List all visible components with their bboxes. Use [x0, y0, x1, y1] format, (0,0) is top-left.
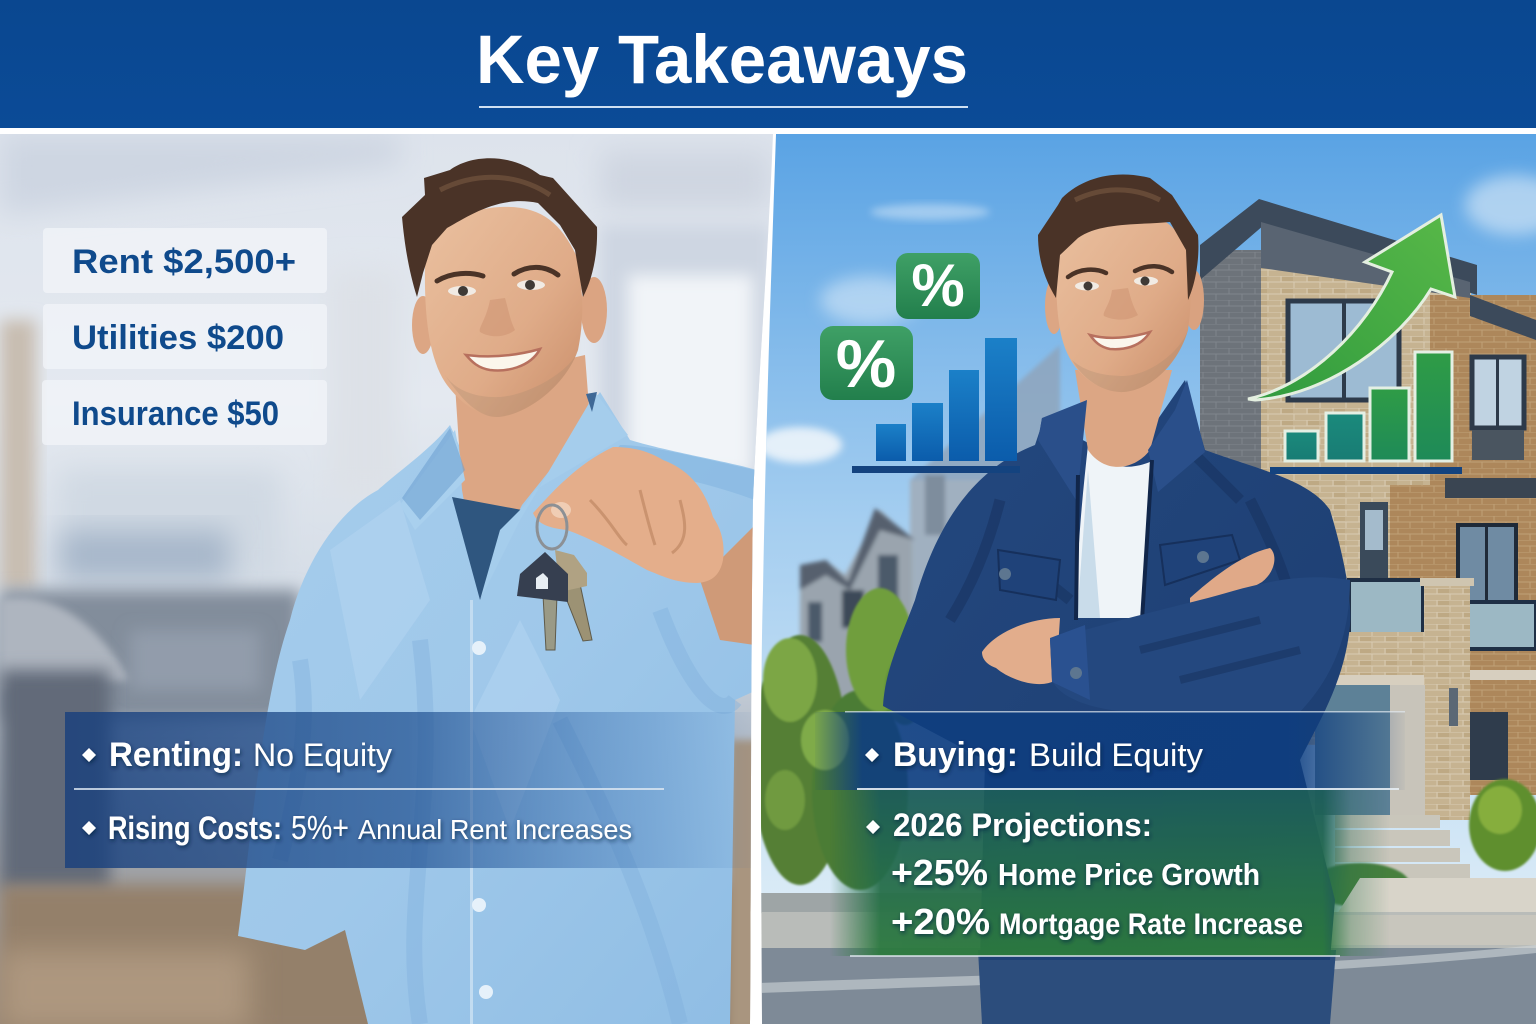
hair: [402, 158, 597, 297]
brows and eyes: [1068, 266, 1172, 277]
panel: buying text: [865, 736, 1303, 942]
ear left: [412, 296, 431, 354]
projection: mortgage rate: [891, 901, 1303, 942]
card: rent: Rent $2,500+: [72, 243, 296, 281]
middle band: [1445, 478, 1536, 498]
smile: [466, 349, 540, 370]
balconies: [1349, 580, 1423, 635]
ear right: [581, 277, 607, 343]
card: insurance: [42, 380, 327, 445]
pockets: [998, 550, 1060, 600]
icon: percent tile upper: [896, 252, 980, 319]
panel: blue buying band: [815, 712, 1405, 790]
upper window: [1288, 301, 1399, 400]
bullet: renting: Renting:: [109, 736, 243, 774]
bullet: rising costs: Annual Rent Increases: [358, 814, 632, 845]
entrance: [1315, 685, 1390, 815]
shirt: [238, 392, 757, 1024]
nose: [480, 298, 515, 336]
lower window: [1458, 525, 1516, 603]
t-shirt: [1077, 445, 1150, 618]
distant houses: [800, 345, 1060, 720]
steps: [1335, 815, 1470, 878]
bullet: rising costs: Rising Costs:: [108, 810, 282, 846]
projection: home price: [891, 852, 1260, 893]
brows and eyes: [437, 267, 558, 281]
bullet: 2026 projections: 2026 Projections:: [893, 807, 1152, 843]
jacket collar: [1038, 400, 1087, 500]
forearm: [700, 525, 755, 645]
brick townhouse: [1200, 199, 1536, 878]
chart: blue rising bars: [852, 338, 1020, 473]
cost cards: [42, 228, 327, 445]
panel: renting text band: [65, 712, 751, 868]
sky: [758, 134, 1536, 914]
card: utilities: Utilities $200: [72, 319, 284, 357]
person with crossed arms: [883, 174, 1350, 1024]
panel: green projections band: [830, 790, 1390, 956]
face: [425, 207, 582, 417]
bullet: buying: Buying:: [893, 736, 1018, 774]
icon: percent tile lower: [820, 326, 913, 402]
side window: [1472, 357, 1524, 428]
bullet: buying: [865, 736, 1203, 774]
card: utilities: [43, 304, 327, 369]
projection: mortgage rate: Mortgage Rate Increase: [999, 908, 1303, 941]
neck: [456, 355, 589, 510]
card: rent: [43, 228, 327, 293]
bullet: buying: Build Equity: [1029, 737, 1203, 773]
title: Key Takeaways: [476, 21, 968, 98]
bullet: renting: No Equity: [253, 737, 392, 773]
bullet: renting: [82, 736, 392, 774]
street and sidewalk: [760, 878, 1536, 1024]
panel: renting: [0, 134, 780, 1024]
trees and shrub: [752, 588, 1536, 907]
left hand: [1190, 548, 1274, 606]
torso jacket: [883, 380, 1350, 960]
collar: [453, 430, 465, 484]
jeans: [978, 950, 1336, 1024]
panel: buying: [752, 134, 1536, 1024]
ears: [1045, 278, 1063, 334]
blurred living room background: [0, 134, 780, 1024]
icon: percent tile lower: %: [836, 326, 896, 402]
chart: green rising bars: [1270, 352, 1462, 474]
arrow: rising green: [1248, 215, 1455, 400]
projection: mortgage rate: +20%: [891, 901, 990, 942]
face: [1056, 210, 1191, 392]
bullet: rising costs: 5%+: [291, 809, 349, 846]
hair: [1038, 174, 1198, 300]
icon: keys: [517, 505, 592, 650]
projection: home price: +25%: [891, 852, 988, 893]
header banner: [0, 0, 1536, 128]
person holding keys: [238, 158, 757, 1024]
card: insurance: Insurance $50: [72, 395, 279, 433]
projection: home price: Home Price Growth: [998, 857, 1260, 892]
hand: [533, 447, 724, 583]
neck: [1075, 370, 1172, 467]
bullet: rising costs: [82, 809, 632, 846]
smile: [1090, 332, 1150, 349]
icon: percent tile upper: %: [911, 252, 965, 319]
ear right: [1184, 270, 1204, 330]
sleeve: [1050, 577, 1350, 712]
column: [1424, 580, 1470, 820]
nose: [1104, 288, 1138, 320]
right hand: [982, 618, 1060, 684]
